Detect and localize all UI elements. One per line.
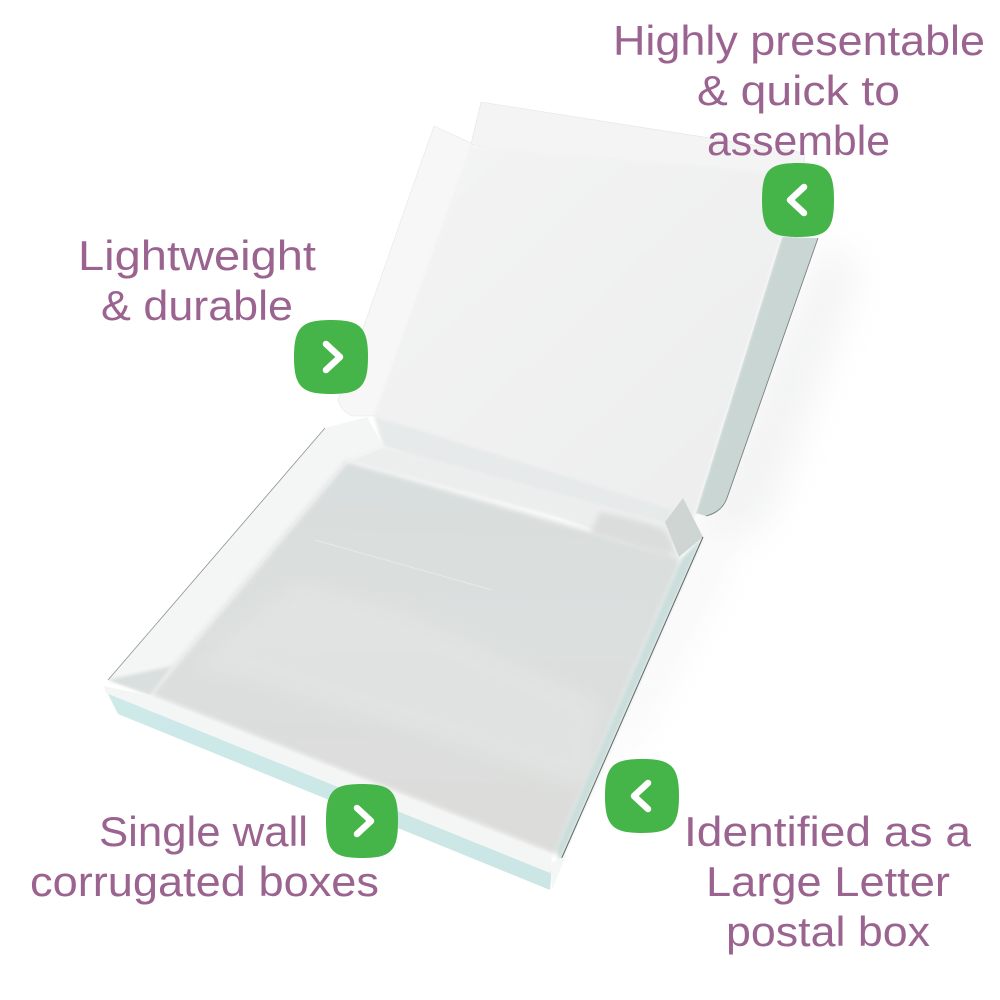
left wall corner (108, 666, 172, 695)
label: lightweight (78, 232, 316, 329)
icon: chevron left, top right (762, 163, 834, 237)
lid: inner panel (374, 146, 800, 548)
floor highlight (190, 580, 600, 790)
label: single wall: corrugated boxes (30, 858, 379, 905)
floor crease (315, 540, 492, 590)
icon: chevron right, bottom left (326, 784, 398, 858)
box floor (150, 461, 680, 855)
label: large letter: Identified as a (684, 808, 972, 855)
label: highly presentable (613, 17, 985, 164)
icon: chevron left, bottom right (605, 759, 679, 833)
left wall edge (108, 428, 325, 680)
hinge strip (374, 416, 672, 560)
label: single wall (30, 808, 379, 905)
label: highly presentable: assemble (707, 117, 890, 164)
right corner tab (665, 498, 703, 557)
front right corner (550, 856, 566, 890)
open box (104, 102, 818, 890)
label: large letter: Large Letter (706, 858, 950, 905)
label: single wall: Single wall (99, 808, 308, 855)
icon: chevron right, left (294, 320, 368, 394)
label: large letter (684, 808, 972, 955)
front rim (104, 686, 552, 873)
left wall (108, 417, 383, 695)
right wall (556, 537, 703, 862)
rear fold of base (347, 446, 672, 548)
label: highly presentable: Highly presentable (613, 17, 985, 64)
lid: left flap (338, 126, 473, 416)
label: lightweight: & durable (101, 282, 293, 329)
label: highly presentable: & quick to (697, 67, 900, 114)
label: lightweight: Lightweight (78, 232, 316, 279)
rear fold shadow (590, 512, 679, 557)
lid: right wall (696, 237, 818, 516)
box shadow (590, 240, 860, 790)
box front outer band (104, 686, 552, 890)
label: large letter: postal box (726, 908, 930, 955)
lid: top flap (471, 102, 805, 238)
